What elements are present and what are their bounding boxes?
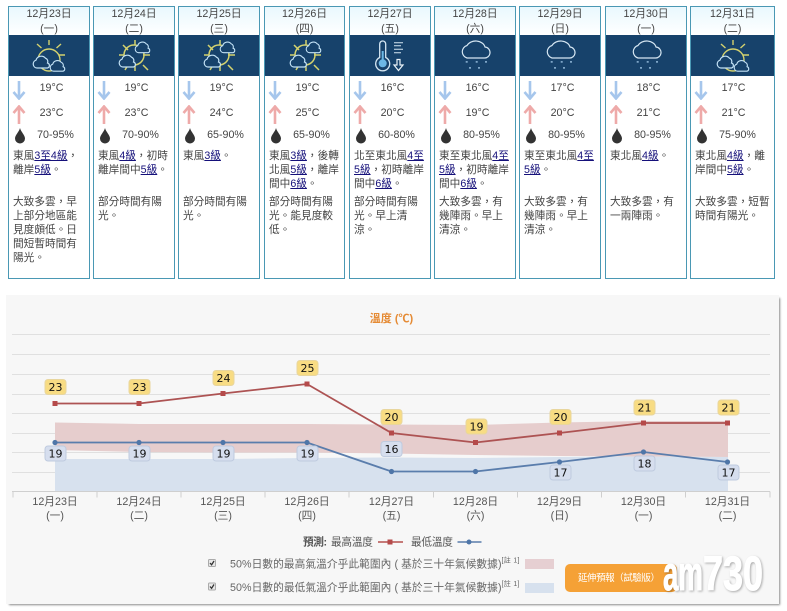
wind [354,150,424,190]
high temperature: 25°C [296,107,319,119]
legend: forecast lines [303,536,482,548]
min temperature value labels [45,442,739,480]
date: 12月28日 [452,8,498,20]
description: 清涼。 [524,224,556,236]
legend: min temperature range: [註 1] [502,579,520,588]
x axis date labels: 12月27日 [369,496,414,508]
panel: forecast 12月25日 [178,6,260,279]
band: 50% min temperature range [55,456,728,491]
wind: 東風3級。 [183,150,232,162]
description: 大致多雲，有 [524,196,588,208]
weather icon header [606,35,686,76]
legend: forecast lines: 最高溫度 [331,536,373,548]
wind: 間中6級。 [269,178,318,190]
panel: forecast 12月29日 [519,6,601,279]
wind: 5級，初時離岸 [354,164,424,176]
button: extended forecast: 延伸預報（試驗版） [578,572,660,584]
wind: 離岸間中5級。 [98,164,168,176]
icon: low temperature arrow [182,81,196,100]
icon: low temperature arrow [609,80,623,100]
x axis date labels: (六) [467,510,484,522]
icon: low temperature arrow [694,80,708,100]
x axis date labels: (三) [214,510,232,522]
icon: humidity drop [696,128,708,144]
wind: 東風4級，初時 [98,150,168,162]
humidity: 80-95% [548,129,585,141]
description: 光。 [183,210,204,222]
weather icon header [265,35,344,76]
weather icon header [691,35,774,76]
min temperature value labels: 17 [554,466,568,480]
description: 涼。 [354,224,375,236]
icon: humidity drop [100,128,110,144]
max temperature value labels [45,360,739,434]
high temperature: 20°C [551,107,574,119]
description: 上部分地區能 [13,210,77,222]
legend: max temperature range: [註 1] [502,556,520,564]
panel: forecast 12月26日 [264,6,345,279]
min temperature value labels: 19 [132,448,146,460]
description: 幾陣雨。早上 [439,210,503,222]
panel: forecast 12月23日 [8,6,90,279]
button: extended forecast [565,564,677,592]
humidity: 75-90% [719,129,756,141]
legend: forecast lines: 最低溫度 [411,536,453,548]
date: (三) [210,23,228,35]
description: 清涼。 [439,224,471,236]
description [98,196,162,222]
x axis date labels: 12月28日 [453,496,498,508]
wind: 東風3級，後轉 [269,150,339,162]
min temperature value labels: 18 [638,458,652,470]
description: 大致多雲，有 [610,196,674,208]
icon: low temperature arrow [98,81,110,100]
panel: forecast 12月28日 [434,6,516,279]
x axis date labels: 12月26日 [284,496,330,508]
date [111,8,157,35]
date [537,8,583,35]
x axis [12,492,770,498]
icon: low temperature arrow [438,81,452,100]
x axis date labels: 12月25日 [200,496,246,508]
wind: 東風3至4級， [13,150,78,162]
description [695,195,770,223]
icon: high temperature arrow [438,105,452,124]
wind [269,150,339,190]
panel: forecast 12月24日 [93,6,175,279]
wind [98,150,168,176]
x axis date labels: (五) [383,510,400,522]
date: (一) [40,23,58,35]
date [282,8,327,35]
x axis date labels: 12月30日 [621,496,666,508]
date: 12月29日 [537,8,583,20]
icon: humidity drop [441,128,451,144]
icon: low temperature arrow [524,81,536,100]
humidity: 80-95% [463,129,500,141]
wind: 東至東北風4至 [439,150,509,162]
legend: min temperature range: 50%日數的最低氣溫介乎此範圍內 ( 基於三十年氣候數據) [230,581,502,594]
max temperature value labels: 23 [132,381,146,394]
wind [13,150,78,176]
weather icon header [94,35,174,76]
low temperature: 16°C [466,82,489,94]
icon: high temperature arrow [98,105,110,124]
low temperature: 17°C [722,82,745,94]
line: max temperature [52,382,730,445]
min temperature value labels: 19 [300,448,314,460]
wind: 東北風4級，離 [695,150,765,162]
description: 一兩陣雨。 [610,210,663,222]
legend: max temperature range [208,556,554,570]
high temperature: 21°C [722,107,745,119]
band: 50% max temperature range [55,421,728,457]
weather icon header [520,35,600,76]
description: 大致多雲，早 [13,196,77,208]
x axis date labels: (一) [46,510,64,522]
high temperature: 23°C [125,107,148,119]
low temperature: 19°C [40,82,63,94]
legend: max temperature range: 50%日數的最高氣溫介乎此範圍內 ( 基於三十年氣候數據) [230,558,502,570]
icon: high temperature arrow [12,105,26,124]
line: min temperature [52,440,730,474]
panel: forecast 12月27日 [349,6,431,279]
description: 部分時間有陽 [98,196,162,208]
humidity: 70-95% [37,129,74,141]
watermark: am730: am [663,548,703,601]
description: 見度頗低。日 [13,224,77,236]
icon: high temperature arrow [694,105,708,125]
wind [695,149,765,177]
description: 部分時間有陽 [269,196,333,208]
description [610,195,674,223]
icon: high temperature arrow [524,105,536,124]
date [26,8,72,35]
icon: high temperature arrow [182,105,196,124]
description: 大致多雲，有 [439,196,503,208]
watermark: am730: 730 [703,548,763,601]
min temperature value labels: 16 [384,443,398,456]
max temperature value labels: 24 [216,372,230,385]
description [354,196,418,236]
icon: low temperature arrow [12,81,26,100]
x axis date labels: (二) [130,510,148,522]
description [524,195,588,237]
high temperature: 20°C [381,107,404,119]
max temperature value labels: 21 [638,402,652,414]
description [183,196,247,222]
humidity: 60-80% [378,129,415,141]
description: 陽光。 [13,252,45,264]
wind: 離岸5級。 [13,164,62,176]
description [269,196,333,236]
wind: 間中6級。 [439,178,488,190]
max temperature value labels: 23 [48,381,62,394]
x axis date labels: 12月24日 [116,496,162,508]
weather icon header [9,35,89,76]
max temperature value labels: 20 [554,411,568,424]
x axis date labels: 12月23日 [32,496,78,508]
icon: high temperature arrow [354,105,366,124]
description: 間短暫時間有 [13,238,77,250]
description [439,196,503,236]
x axis date labels: (日) [551,510,568,522]
date: (四) [296,23,313,35]
icon: low temperature arrow [354,81,366,100]
icon: humidity drop [271,128,281,144]
high temperature: 23°C [40,107,63,119]
date [452,8,498,35]
date: 12月30日 [623,8,669,20]
x axis date labels [32,496,750,522]
wind: 北風5級，離岸 [269,164,339,176]
icon: humidity drop [15,128,25,144]
x axis date labels: (四) [298,510,316,522]
description: 低。 [269,224,290,236]
x axis date labels: 12月31日 [705,496,750,508]
wind: 東至東北風4至 [524,150,594,162]
low temperature: 16°C [381,82,404,94]
min temperature value labels: 17 [722,466,736,480]
max temperature value labels: 20 [384,411,398,424]
x axis date labels: (一) [635,510,652,522]
max temperature value labels: 21 [722,402,736,414]
weather icon header [435,35,515,76]
date: (二) [125,23,143,35]
icon: low temperature arrow [268,81,282,100]
weather icon header [179,35,259,76]
panel: temperature chart background [6,295,779,604]
low temperature: 18°C [637,82,660,94]
description: 時間有陽光。 [695,210,759,222]
high temperature: 21°C [637,107,660,119]
date: (一) [637,23,655,35]
date: 12月24日 [111,8,157,20]
date [196,8,242,35]
date [367,8,413,35]
humidity: 65-90% [293,129,330,141]
date [606,7,686,37]
icon: humidity drop [611,128,623,144]
icon: high temperature arrow [268,105,282,124]
icon: humidity drop [356,128,366,144]
description: 大致多雲，短暫 [695,196,770,208]
watermark: am730 [663,548,763,601]
icon: humidity drop [526,128,536,144]
panel: forecast 12月31日 [690,6,775,279]
high temperature: 24°C [210,107,233,119]
wind: 5級。 [524,164,551,176]
x axis date labels: 12月29日 [537,496,582,508]
date: (六) [466,23,484,35]
description: 部分時間有陽 [354,196,418,208]
low temperature: 19°C [296,82,319,94]
wind: 東北風4級。 [610,150,669,162]
panel: forecast 12月30日 [605,6,687,279]
date: (五) [381,23,399,35]
description [13,196,77,264]
icon: high temperature arrow [609,105,623,125]
wind: 北至東北風4至 [354,150,424,162]
low temperature: 19°C [125,82,148,94]
date: 12月25日 [196,8,242,20]
max temperature value labels: 25 [300,362,314,375]
min temperature value labels: 19 [48,448,62,460]
date: 12月31日 [710,8,755,20]
description: 幾陣雨。早上 [524,210,588,222]
date: 12月26日 [282,8,327,20]
date: (日) [551,23,569,35]
chart title: 溫度 (℃) [370,311,414,325]
description: 光。 [98,210,119,222]
humidity: 65-90% [207,129,244,141]
wind [439,150,509,190]
low temperature: 19°C [210,82,233,94]
legend: forecast lines: 預測: [303,536,327,548]
humidity: 80-95% [634,129,671,141]
date: 12月23日 [26,8,72,20]
date [691,7,774,37]
icon: humidity drop [185,128,195,144]
date: 12月27日 [367,8,413,20]
max temperature value labels: 19 [470,420,484,434]
wind: 5級，初時離岸 [439,164,509,176]
description: 光。能見度較 [269,210,333,222]
date: (二) [724,23,741,35]
humidity: 70-90% [122,129,159,141]
x axis date labels: (二) [719,510,736,522]
wind: 間中6級。 [354,178,403,190]
wind: 岸間中5級。 [695,164,754,176]
description: 光。早上清 [354,210,407,222]
description: 部分時間有陽 [183,196,247,208]
legend: min temperature range [208,579,554,594]
high temperature: 19°C [466,107,489,119]
low temperature: 17°C [551,82,574,94]
min temperature value labels: 19 [216,448,230,460]
weather icon header [350,35,430,76]
wind [524,149,594,177]
